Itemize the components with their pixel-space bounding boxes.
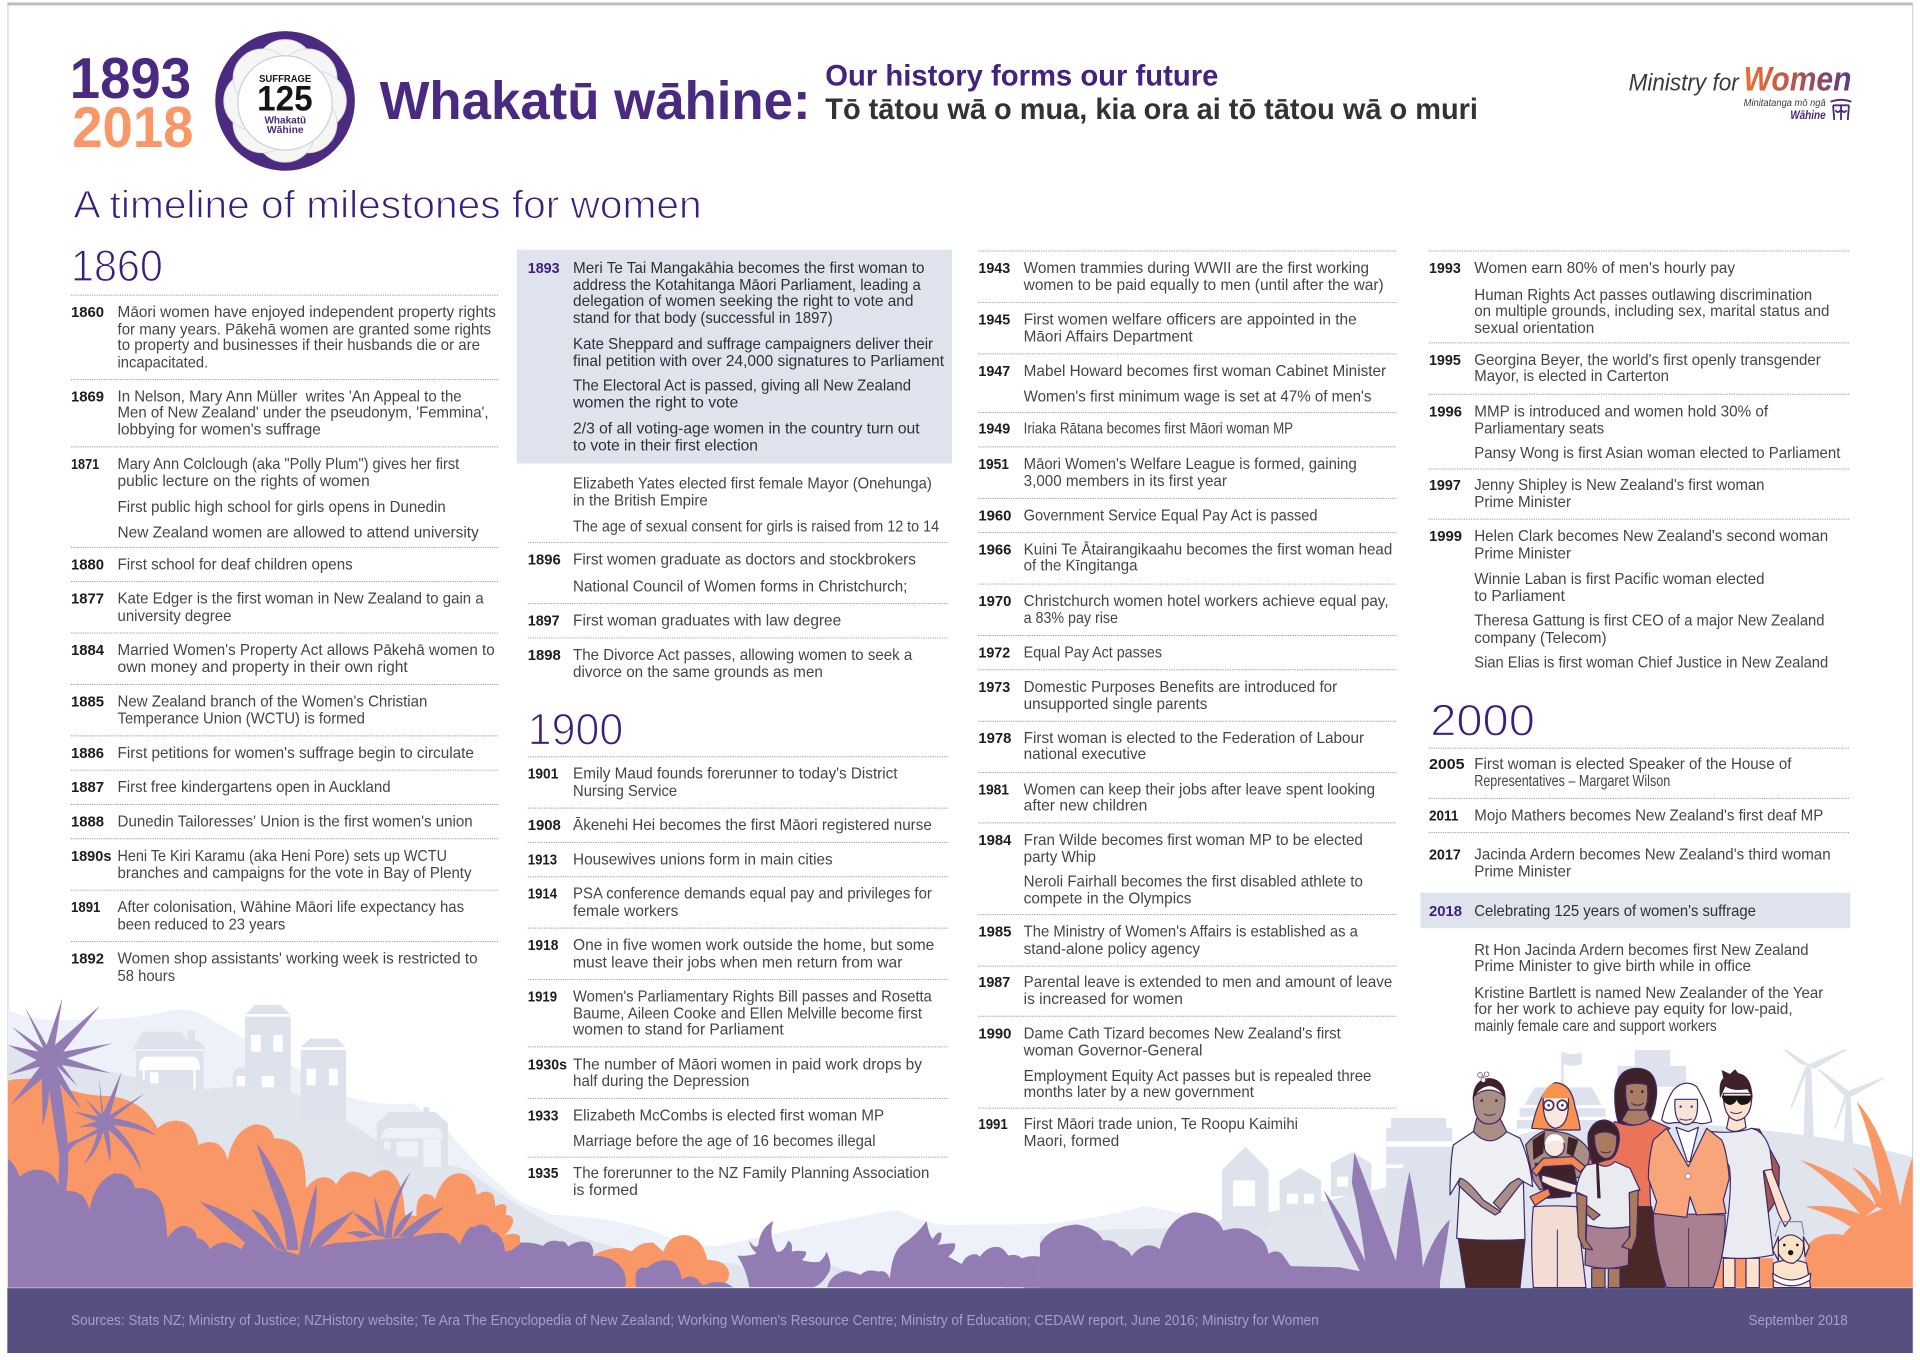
plant: palm 1 — [8, 998, 113, 1191]
entry 1949: 1949 — [978, 420, 1010, 437]
entry 1893 continued: Elizabeth Yates elected first female Mayor (Onehunga) — [573, 476, 932, 493]
entry 1913: Housewives unions form in main cities — [573, 851, 833, 868]
highlight box 1893: stand for that body (successful in 1897) — [573, 310, 833, 327]
entry 1890s — [71, 848, 472, 882]
entry 1945: 1945 — [978, 311, 1011, 328]
entry 1943: Women trammies during WWII are the first working — [1024, 260, 1369, 277]
house windows — [139, 1035, 338, 1089]
entry 1973: unsupported single parents — [1024, 696, 1208, 713]
entry 1893 continued: The age of sexual consent for girls is raised from 12 to 14 — [573, 518, 939, 535]
entry 1869: In Nelson, Mary Ann Müller writes 'An Appeal to the — [118, 389, 462, 406]
entry 1935: 1935 — [528, 1165, 559, 1182]
entry 1877: Kate Edger is the first woman in New Zealand to gain a — [118, 591, 484, 608]
houses — [133, 1005, 448, 1167]
entry 1877 — [71, 591, 484, 625]
entry 1996: MMP is introduced and women hold 30% of — [1474, 403, 1769, 420]
entry 1996: Parliamentary seats — [1474, 420, 1604, 437]
baby in carrier — [1530, 1134, 1585, 1206]
entry 1898: The Divorce Act passes, allowing women to seek a — [573, 647, 913, 664]
entry 1908: 1908 — [528, 817, 561, 834]
highlight box 2018 — [1420, 893, 1850, 928]
entry 1951: 1951 — [978, 456, 1009, 473]
plant: purple flame hedge — [827, 1221, 1040, 1287]
entry 1918 — [528, 937, 934, 971]
panel: column 2, 1893 to 1935 — [517, 250, 952, 1199]
entry 1891: 1891 — [71, 899, 101, 916]
entry 1933: 1933 — [528, 1107, 558, 1124]
entry 1945: Māori Affairs Department — [1024, 329, 1193, 346]
right house openings — [381, 1128, 443, 1167]
entry 1990: Employment Equity Act passes but is repealed three — [1024, 1068, 1371, 1085]
entry 1972: Equal Pay Act passes — [1024, 645, 1162, 662]
entry 2017 — [1429, 847, 1831, 881]
plant: palm 2 — [68, 1072, 156, 1172]
entry 1999: Theresa Gattung is first CEO of a major New Zealand — [1474, 613, 1824, 630]
highlight box 1893: 2/3 of all voting-age women in the country turn out — [573, 420, 920, 437]
entry 1860 — [71, 304, 496, 371]
entry 1995: Georgina Beyer, the world's first openly transgender — [1474, 352, 1821, 369]
entry 1880: First school for deaf children opens — [118, 556, 353, 573]
entry 1999: Prime Minister — [1474, 545, 1571, 562]
entry 2018 continued: for her work to achieve pay equity for low-paid, — [1474, 1001, 1793, 1018]
illustration: parliament and flag — [1517, 1050, 1686, 1129]
entry 1869: Men of New Zealand' under the pseudonym, 'Femmina', — [118, 405, 489, 422]
entry 1886: 1886 — [71, 745, 104, 762]
entry 1999: company (Telecom) — [1474, 630, 1607, 647]
entry 1985 — [978, 924, 1358, 958]
entry 1884 — [71, 642, 495, 676]
entry 1869 — [71, 389, 489, 439]
entry 1869: 1869 — [71, 389, 104, 406]
entry 1887: First free kindergartens open in Auckland — [118, 779, 391, 796]
entry 1993 — [1429, 260, 1829, 337]
illustration: left hillside with houses and plants — [8, 998, 520, 1288]
entry 1884: 1884 — [71, 642, 105, 659]
highlight box 1893 — [517, 250, 952, 463]
entry 1914: PSA conference demands equal pay and privileges for — [573, 886, 932, 903]
entry 1984: 1984 — [978, 832, 1012, 849]
entry 1860: Māori women have enjoyed independent property rights — [118, 304, 496, 321]
entry 1947 — [978, 363, 1386, 406]
years 1893 and 2018 — [70, 47, 193, 160]
entry 1860: incapacitated. — [118, 354, 208, 371]
entry 1901: 1901 — [528, 766, 559, 783]
entry 1880: 1880 — [71, 556, 104, 573]
entry 1991: 1991 — [978, 1116, 1008, 1133]
person: girl with braid — [1576, 1120, 1640, 1288]
entry 1930s: 1930s — [528, 1057, 567, 1074]
entry 1913: 1913 — [528, 851, 557, 868]
entry 1990: woman Governor-General — [1023, 1042, 1202, 1059]
entry 1987 — [978, 974, 1392, 1008]
entry 1984: compete in the Olympics — [1024, 891, 1192, 908]
entry 1860: to property and businesses if their husbands die or are — [118, 337, 480, 354]
entry 1951: 3,000 members in its first year — [1024, 473, 1227, 490]
entry 1892: Women shop assistants' working week is restricted to — [118, 951, 478, 968]
entry 1966: 1966 — [978, 542, 1011, 559]
entry 1984 — [978, 832, 1363, 908]
logo: Ministry for Women: Minitatanga mō ngā — [1744, 98, 1826, 109]
entry 2005: Representatives – Margaret Wilson — [1474, 773, 1670, 790]
entry 1884: Married Women's Property Act allows Pākehā women to — [118, 642, 495, 659]
highlight box 1893: Meri Te Tai Mangakāhia becomes the first woman to — [573, 260, 924, 277]
hillside: pale blue — [8, 1009, 520, 1288]
entry 1951 — [978, 456, 1357, 490]
date: September 2018 — [1749, 1313, 1848, 1329]
entry 1930s: half during the Depression — [573, 1073, 749, 1090]
entry 1993: Women earn 80% of men's hourly pay — [1474, 260, 1735, 277]
logo: Ministry for Women: Women — [1744, 61, 1851, 99]
entry 1891 — [71, 899, 464, 933]
entry 1981: 1981 — [978, 782, 1009, 799]
entry 1973: Domestic Purposes Benefits are introduced for — [1024, 679, 1337, 696]
sources line: Sources: Stats NZ; Ministry of Justice; NZHistory website; Te Ara The Encyclopedia of New Zealand; Working Women's Resource Centre; Ministry of Education; CEDAW report, June 2016; Ministry for Women — [71, 1313, 1319, 1329]
logo: Ministry for Women — [1629, 61, 1851, 122]
person: woman with orange hair carrying baby — [1526, 1083, 1590, 1288]
main heading: A timeline of milestones for women — [73, 184, 702, 227]
entry 1949: Iriaka Rātana becomes first Māori woman MP — [1024, 420, 1293, 437]
entry 1918: One in five women work outside the home, but some — [573, 937, 934, 954]
entry 1885: Temperance Union (WCTU) is formed — [118, 711, 365, 728]
entry 1930s: The number of Māori women in paid work drops by — [573, 1057, 922, 1074]
background hill: grey — [1004, 1120, 1913, 1288]
highlight box 1893: address the Kotahitanga Māori Parliament, leading a — [573, 277, 921, 294]
highlight box 2018: Celebrating 125 years of women's suffrage — [1474, 903, 1756, 920]
hillside: grey — [8, 1045, 520, 1288]
entry 1935: The forerunner to the NZ Family Planning Association — [573, 1165, 929, 1182]
entry 1871: Mary Ann Colclough (aka "Polly Plum") gives her first — [118, 456, 460, 473]
entry 1871: public lecture on the rights of women — [118, 473, 370, 490]
entry 1990: months later by a new government — [1024, 1084, 1255, 1101]
entry 1960: Government Service Equal Pay Act is passed — [1024, 507, 1318, 524]
entry 1860: for many years. Pākehā women are granted some rights — [118, 321, 491, 338]
entry 2018 continued: mainly female care and support workers — [1474, 1018, 1717, 1035]
title: Whakatū wāhine: — [380, 71, 811, 131]
entry 1947: 1947 — [978, 363, 1010, 380]
entry 1893 continued: in the British Empire — [573, 493, 708, 510]
badge: Suffrage 125: Whakatū — [264, 116, 306, 127]
entry 1933 — [528, 1107, 884, 1150]
entry 2011: 2011 — [1429, 807, 1459, 824]
entry 1978: First woman is elected to the Federation of Labour — [1024, 730, 1364, 747]
subtitle maori: Tō tātou wā o mua, kia ora ai tō tātou wā o muri — [825, 93, 1478, 126]
entry 2018 continued: Kristine Bartlett is named New Zealander of the Year — [1474, 985, 1823, 1002]
entry 1908: Ākenehi Hei becomes the first Māori registered nurse — [573, 817, 932, 834]
plant: purple flame bush — [737, 1221, 830, 1287]
decade heading 1860: 1860 — [71, 242, 163, 291]
highlight box 1893: women the right to vote — [572, 395, 738, 412]
entry 1919: 1919 — [528, 989, 557, 1006]
footer bar — [7, 1288, 1913, 1353]
bush: purple inside small orange — [636, 1260, 733, 1287]
logo icon — [1831, 100, 1851, 120]
decade heading 1900: 1900 — [528, 705, 623, 754]
entry 1991 — [978, 1116, 1298, 1150]
entry 1951: Māori Women's Welfare League is formed, gaining — [1024, 456, 1357, 473]
entry 1966: Kuini Te Ātairangikaahu becomes the first woman head — [1024, 542, 1392, 559]
entry 1947: Mabel Howard becomes first woman Cabinet Minister — [1024, 363, 1386, 380]
entry 1891: been reduced to 23 years — [118, 916, 286, 933]
decade heading 2000: 2000 — [1430, 696, 1535, 745]
entry 2018 continued: Prime Minister to give birth while in office — [1474, 958, 1751, 975]
bush: purple base — [8, 1159, 520, 1288]
entry 1996: Pansy Wong is first Asian woman elected to Parliament — [1474, 445, 1841, 462]
entry 1990: 1990 — [978, 1025, 1011, 1042]
entry 1919 — [528, 989, 932, 1039]
plant: centre flax — [1324, 1152, 1450, 1288]
badge: Suffrage 125: Wāhine — [267, 125, 304, 136]
entry 1935: is formed — [573, 1182, 638, 1199]
badge: Suffrage 125: SUFFRAGE — [259, 74, 311, 85]
entry 1933: Elizabeth McCombs is elected first woman MP — [573, 1107, 884, 1124]
guide dog with harness — [1773, 1222, 1811, 1288]
entry 1896: 1896 — [528, 551, 561, 568]
entry 1871: First public high school for girls opens in Dunedin — [118, 499, 446, 516]
entry 2018 continued: Rt Hon Jacinda Ardern becomes first New Zealand — [1474, 942, 1809, 959]
person: tall woman with orange top — [1587, 1068, 1670, 1288]
entry 1869: lobbying for women's suffrage — [118, 422, 321, 439]
entry 2005 — [1429, 756, 1792, 790]
entry 1896 — [528, 551, 916, 595]
highlight box 1893: delegation of women seeking the right to vote and — [573, 293, 913, 310]
entry 1884: own money and property in their own right — [118, 659, 408, 676]
entry 2017: Jacinda Ardern becomes New Zealand's third woman — [1474, 847, 1831, 864]
entry 1984: Fran Wilde becomes first woman MP to be elected — [1024, 832, 1363, 849]
entry 1919: Baume, Aileen Cooke and Ellen Melville become first — [573, 1006, 923, 1023]
subtitle english: Our history forms our future — [825, 60, 1218, 93]
logo: Ministry for Women: Wāhine — [1790, 108, 1826, 122]
entry 1898: 1898 — [528, 647, 561, 664]
entry 1914: female workers — [573, 903, 679, 920]
entry 1984: Neroli Fairhall becomes the first disabled athlete to — [1024, 874, 1363, 891]
entry 1886: First petitions for women's suffrage begin to circulate — [118, 745, 474, 762]
entry 1987: is increased for women — [1024, 991, 1183, 1008]
entry 1893 continued — [573, 476, 939, 535]
highlight box 1893: to vote in their first election — [573, 438, 758, 455]
entry 1890s: 1890s — [71, 848, 111, 865]
entry 1892 — [71, 951, 478, 985]
entry 1918: must leave their jobs when men return from war — [573, 954, 902, 971]
entry 2005: 2005 — [1429, 756, 1465, 773]
entry 1985: stand-alone policy agency — [1024, 941, 1200, 958]
entry 1888: Dunedin Tailoresses' Union is the first women's union — [118, 814, 473, 831]
entry 1890s: branches and campaigns for the vote in Bay of Plenty — [118, 865, 472, 882]
entry 1919: Women's Parliamentary Rights Bill passes and Rosetta — [573, 989, 932, 1006]
illustration: wind turbines — [1785, 1050, 1883, 1144]
entry 2018 continued — [1474, 942, 1823, 1035]
entry 1935 — [528, 1165, 929, 1199]
entry 1985: 1985 — [978, 924, 1012, 941]
entry 1999 — [1429, 528, 1828, 671]
entry 1997: 1997 — [1429, 477, 1461, 494]
entry 1997: Prime Minister — [1474, 494, 1571, 511]
entry 1885: New Zealand branch of the Women's Christian — [118, 694, 427, 711]
entry 1877: university degree — [118, 608, 231, 625]
entry 1996 — [1429, 403, 1841, 462]
entry 1933: Marriage before the age of 16 becomes illegal — [573, 1133, 876, 1150]
years 1893 and 2018: 1893 — [70, 47, 191, 111]
background hill: pale blue — [1040, 1206, 1224, 1288]
entry 1970 — [978, 593, 1389, 627]
entry 1877: 1877 — [71, 591, 104, 608]
entry 1991: Maori, formed — [1024, 1133, 1119, 1150]
entry 1985: The Ministry of Women's Affairs is established as a — [1024, 924, 1358, 941]
entry 1901: Nursing Service — [573, 783, 677, 800]
entry 1885: 1885 — [71, 694, 105, 711]
entry 1885 — [71, 694, 427, 728]
entry 1993: Human Rights Act passes outlawing discrimination — [1474, 287, 1812, 304]
entry 1999: Helen Clark becomes New Zealand's second woman — [1474, 528, 1828, 545]
entry 1914 — [528, 886, 932, 920]
illustration: right background hills and centre buildings — [1004, 1118, 1913, 1288]
illustration: lower centre landscape — [520, 1202, 1040, 1287]
entry 1891: After colonisation, Wāhine Māori life expectancy has — [118, 899, 464, 916]
logo: Ministry for Women: Ministry for — [1629, 70, 1740, 97]
entry 1896: First women graduate as doctors and stockbrokers — [573, 551, 916, 568]
entry 1945: First women welfare officers are appointed in the — [1024, 311, 1357, 328]
plant: right orange plant — [1603, 1102, 1913, 1288]
entry 2017: 2017 — [1429, 847, 1461, 864]
entry 1871 — [71, 456, 479, 542]
years 1893 and 2018: 2018 — [72, 96, 193, 160]
entry 1987: Parental leave is extended to men and amount of leave — [1024, 974, 1392, 991]
entry 1871: New Zealand women are allowed to attend university — [118, 525, 479, 542]
entry 1871: 1871 — [71, 456, 100, 473]
entry 1914: 1914 — [528, 886, 558, 903]
highlight box 2018: 2018 — [1429, 903, 1462, 920]
entry 1981: Women can keep their jobs after leave spent looking — [1024, 782, 1375, 799]
centre hill: pale blue — [520, 1202, 1040, 1287]
entry 1892: 58 hours — [118, 968, 175, 985]
header — [70, 31, 1851, 227]
panel: column 1, 1860 to 1892 — [71, 242, 498, 985]
entry 1918: 1918 — [528, 937, 558, 954]
entry 1901: Emily Maud founds forerunner to today's District — [573, 766, 898, 783]
entry 1995: Mayor, is elected in Carterton — [1474, 368, 1669, 385]
entry 1978: 1978 — [978, 730, 1011, 747]
entry 1943: 1943 — [978, 260, 1010, 277]
entry 1943 — [978, 260, 1384, 294]
entry 1887: 1887 — [71, 779, 104, 796]
entry 1970: 1970 — [978, 593, 1011, 610]
panel: column 4, 1993 to 2018 — [1420, 251, 1850, 1035]
person: older woman with white hair and salmon jacket — [1648, 1083, 1729, 1288]
entry 1897: First woman graduates with law degree — [573, 613, 841, 630]
entry 1972: 1972 — [978, 645, 1010, 662]
entry 1898 — [528, 647, 913, 681]
entry 1945 — [978, 311, 1357, 346]
entry 1987: 1987 — [978, 974, 1010, 991]
entry 1970: Christchurch women hotel workers achieve equal pay, — [1024, 593, 1389, 610]
person: woman in white shirt with flower in hair — [1450, 1072, 1533, 1288]
entry 1997: Jenny Shipley is New Zealand's first woman — [1474, 477, 1764, 494]
entry 1897: 1897 — [528, 613, 560, 630]
entry 1999: to Parliament — [1474, 588, 1566, 605]
panel: column 3, 1943 to 1991 — [978, 251, 1396, 1150]
bush: orange — [8, 1079, 520, 1288]
entry 1901 — [528, 766, 898, 800]
entry 1999: Sian Elias is first woman Chief Justice in New Zealand — [1474, 654, 1828, 671]
entry 1993: 1993 — [1429, 260, 1461, 277]
plant: flax tuft A — [200, 1143, 355, 1255]
person: woman with sunglasses and backpack — [1712, 1069, 1791, 1288]
entry 1999: 1999 — [1429, 528, 1462, 545]
entry 1990: Dame Cath Tizard becomes New Zealand's first — [1024, 1025, 1341, 1042]
entry 1970: a 83% pay rise — [1024, 610, 1118, 627]
buildings behind the centre hedge — [1222, 1118, 1453, 1229]
plant: flax tuft B — [345, 1172, 444, 1238]
entry 1996: 1996 — [1429, 403, 1462, 420]
entry 1892: 1892 — [71, 951, 104, 968]
entry 1898: divorce on the same grounds as men — [573, 664, 823, 681]
entry 1993: sexual orientation — [1474, 320, 1594, 337]
centre building windows — [1233, 1164, 1403, 1206]
entry 1973 — [978, 679, 1337, 713]
entry 1978 — [978, 730, 1364, 763]
bush: small orange — [593, 1235, 729, 1287]
entry 1943: women to be paid equally to men (until after the war) — [1023, 277, 1384, 294]
badge: Suffrage 125: 125 — [257, 80, 313, 119]
entry 1860: 1860 — [71, 304, 104, 321]
badge: Suffrage 125 — [215, 31, 355, 171]
entry 1966: of the Kīngitanga — [1024, 558, 1138, 575]
highlight box 1893: 1893 — [528, 260, 560, 277]
highlight box 1893: The Electoral Act is passed, giving all New Zealand — [573, 378, 911, 395]
entry 1890s: Heni Te Kiri Karamu (aka Heni Pore) sets up WCTU — [118, 848, 447, 865]
entry 1993: on multiple grounds, including sex, marital status and — [1474, 303, 1829, 320]
entry 2005: First woman is elected Speaker of the House of — [1474, 756, 1792, 773]
entry 1999: Winnie Laban is first Pacific woman elected — [1474, 571, 1764, 588]
entry 1930s — [528, 1057, 922, 1090]
entry 2011: Mojo Mathers becomes New Zealand's first deaf MP — [1474, 807, 1823, 824]
entry 1990 — [978, 1025, 1371, 1101]
entry 1888: 1888 — [71, 814, 104, 831]
entry 1966 — [978, 542, 1392, 575]
entry 1981: after new children — [1024, 798, 1147, 815]
entry 1947: Women's first minimum wage is set at 47% of men's — [1024, 389, 1372, 406]
entry 1995 — [1429, 352, 1821, 385]
entry 1896: National Council of Women forms in Christchurch; — [573, 578, 907, 595]
entry 1995: 1995 — [1429, 352, 1461, 369]
entry 1960: 1960 — [978, 507, 1011, 524]
entry 1981 — [978, 782, 1375, 815]
entry 1919: women to stand for Parliament — [572, 1022, 784, 1039]
highlight box 1893: Kate Sheppard and suffrage campaigners deliver their — [573, 336, 933, 353]
bush: purple hedge — [520, 1241, 626, 1287]
entry 1997 — [1429, 477, 1764, 511]
entry 1973: 1973 — [978, 679, 1010, 696]
centre hill: grey — [520, 1206, 1040, 1287]
illustration: group of women and guide dog — [1450, 1068, 1913, 1288]
entry 2017: Prime Minister — [1474, 864, 1571, 881]
hedge: centre purple — [1024, 1212, 1440, 1288]
entry 1978: national executive — [1024, 746, 1146, 763]
entry 1991: First Māori trade union, Te Roopu Kaimihi — [1024, 1116, 1298, 1133]
highlight box 1893: final petition with over 24,000 signatures to Parliament — [573, 353, 945, 370]
entry 1984: party Whip — [1024, 849, 1096, 866]
